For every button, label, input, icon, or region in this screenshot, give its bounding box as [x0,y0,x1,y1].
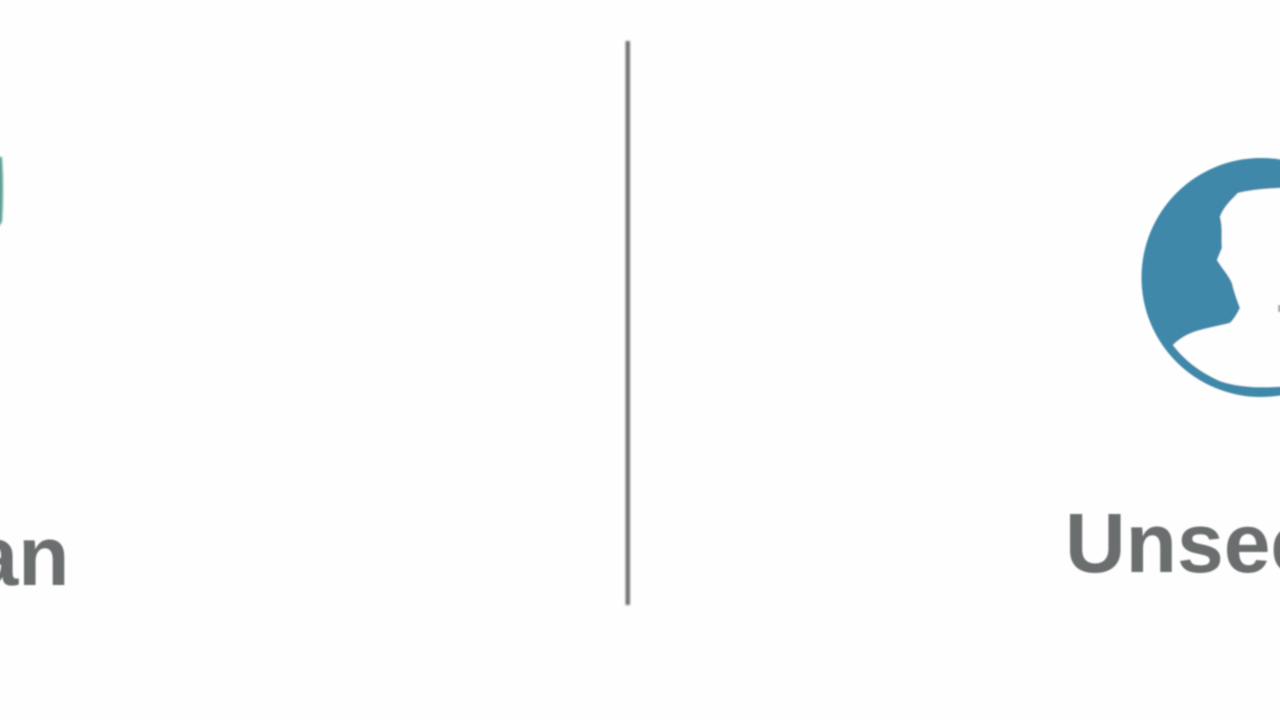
icon: cropped teal edge of left icon [0,157,3,230]
icon circle [1142,158,1280,397]
small mark at the crop edge [1278,305,1280,312]
icon: person silhouette in blue circle [1142,158,1280,397]
head and shoulders silhouette [1173,187,1280,387]
central vertical divider [626,41,630,605]
